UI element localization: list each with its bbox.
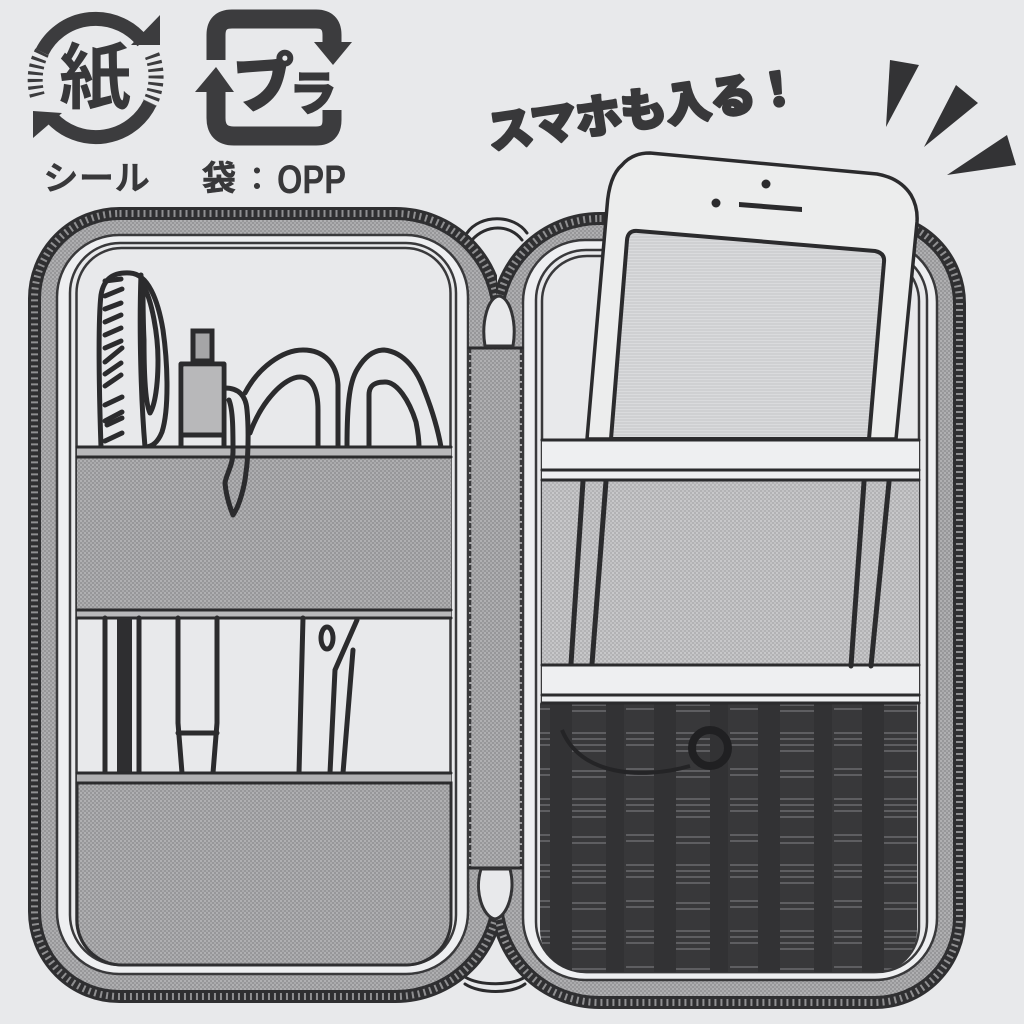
icon: plastic recycling mark: プ — [231, 49, 298, 122]
icon: emphasis spikes — [886, 60, 1016, 175]
icon: scissors blades — [299, 618, 357, 773]
center spine strip — [469, 305, 522, 868]
right white band — [523, 240, 937, 980]
icon: plastic recycling mark — [195, 19, 352, 136]
icon: paper recycling mark: 紙 — [59, 39, 131, 119]
callout: smartphone fits too: スマホも入る！ — [484, 61, 804, 159]
bottom oval opening — [479, 869, 512, 919]
right zipper border — [496, 218, 960, 1002]
pocket: dark lower — [540, 703, 917, 972]
zipper ring: top — [467, 219, 527, 240]
left zipper border — [34, 214, 498, 996]
panel: right pouch side — [496, 218, 960, 1002]
pocket band: upper white strap — [542, 440, 919, 480]
phone: upper body — [542, 153, 919, 440]
pocket: gray mesh — [542, 480, 919, 665]
right interior — [536, 250, 927, 972]
zipper ring: bottom — [465, 977, 525, 992]
icon: comb and ruler tool — [99, 273, 167, 447]
phone screen — [611, 231, 884, 439]
pocket: lower left — [77, 773, 451, 965]
top oval opening — [484, 296, 514, 346]
icon: scissors strap hook — [225, 388, 248, 515]
left white band — [57, 235, 468, 974]
pocket band: lower white strap — [542, 665, 919, 703]
icon: pencil — [105, 618, 139, 773]
left interior — [70, 243, 456, 965]
label: bag material — [202, 158, 346, 202]
icon: plastic recycling mark: ラ — [289, 68, 337, 121]
phone through mesh pocket — [571, 481, 889, 666]
panel: left pouch side — [34, 214, 498, 996]
phone sensor dots and speaker — [712, 180, 802, 212]
icon: scissors handles — [245, 350, 441, 447]
label: seal material: シール — [43, 160, 150, 198]
icon: paper recycling mark — [33, 15, 160, 138]
icon: small bottle — [181, 331, 224, 447]
pocket band: middle stitching — [77, 610, 451, 619]
label: bag material: ： — [241, 161, 273, 197]
pocket: upper left — [77, 447, 451, 610]
label: bag material: 袋 — [202, 160, 236, 198]
icon: pen — [178, 618, 217, 773]
label: bag material: OPP — [277, 158, 346, 202]
